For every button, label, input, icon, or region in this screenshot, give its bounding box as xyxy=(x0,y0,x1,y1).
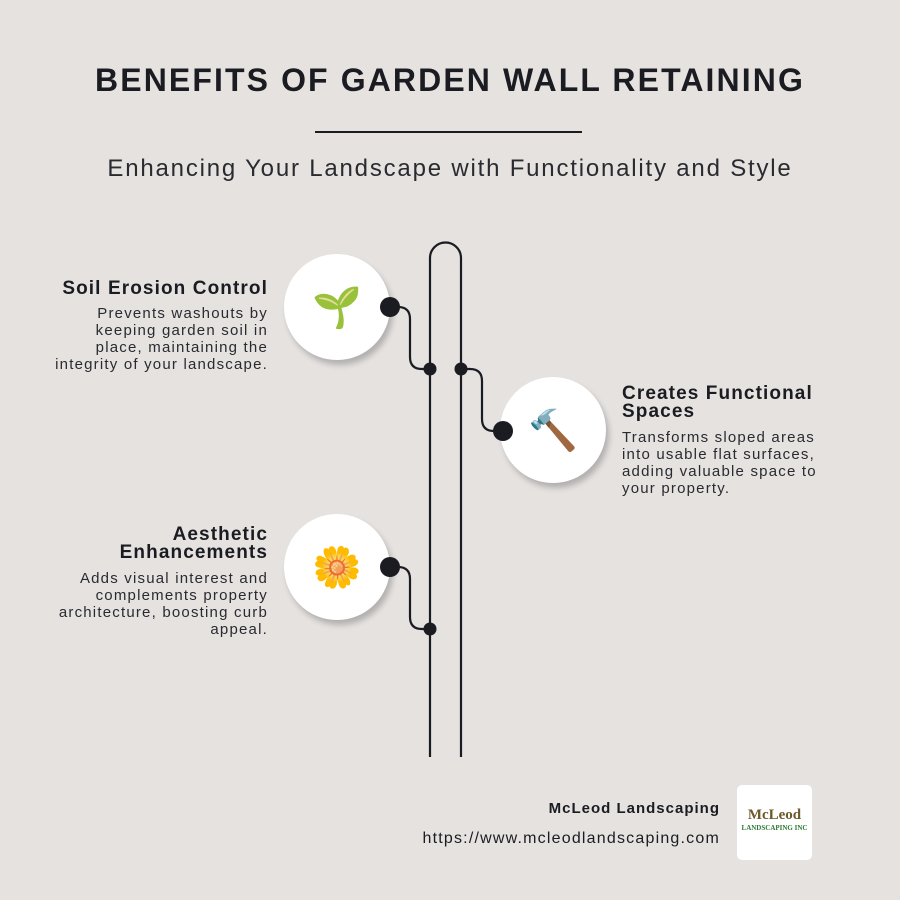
icon: flower: 🌼 xyxy=(312,544,362,590)
text: functional spaces: Creates Functional xyxy=(622,383,813,404)
title: BENEFITS OF GARDEN WALL RETAINING xyxy=(95,62,805,98)
logo xyxy=(737,785,812,860)
text: aesthetic: complements property xyxy=(96,587,268,604)
text: soil erosion: Prevents washouts by xyxy=(97,305,268,322)
logo: McLeod xyxy=(748,807,801,823)
subtitle: Enhancing Your Landscape with Functionality and Style xyxy=(107,155,793,182)
footer text: https://www.mcleodlandscaping.com xyxy=(422,830,720,847)
text: soil erosion xyxy=(55,278,268,373)
icon: sprout: 🌱 xyxy=(312,284,362,330)
text: aesthetic: appeal. xyxy=(210,621,268,638)
text: functional spaces: Transforms sloped areas xyxy=(622,429,815,446)
text: functional spaces xyxy=(622,383,817,497)
text: soil erosion: integrity of your landscape. xyxy=(55,356,268,373)
icon: hammer: 🔨 xyxy=(528,406,578,454)
text: functional spaces: Spaces xyxy=(622,401,695,422)
text: soil erosion: keeping garden soil in xyxy=(96,322,268,339)
footer text: McLeod Landscaping xyxy=(549,800,720,817)
icon: flower xyxy=(284,514,390,620)
text: soil erosion: place, maintaining the xyxy=(96,339,268,356)
footer text xyxy=(422,800,720,847)
text: functional spaces: into usable flat surfaces, xyxy=(622,446,815,463)
text: functional spaces: your property. xyxy=(622,480,730,497)
text: aesthetic xyxy=(59,524,268,638)
logo: LANDSCAPING INC xyxy=(742,824,807,832)
text: aesthetic: Enhancements xyxy=(120,542,268,563)
text: aesthetic: architecture, boosting curb xyxy=(59,604,268,621)
text: aesthetic: Adds visual interest and xyxy=(80,570,268,587)
icon: sprout xyxy=(284,254,390,360)
text: aesthetic: Aesthetic xyxy=(173,524,268,545)
text: functional spaces: adding valuable space to xyxy=(622,463,817,480)
icon: hammer xyxy=(500,377,606,483)
text: soil erosion: Soil Erosion Control xyxy=(62,278,268,299)
